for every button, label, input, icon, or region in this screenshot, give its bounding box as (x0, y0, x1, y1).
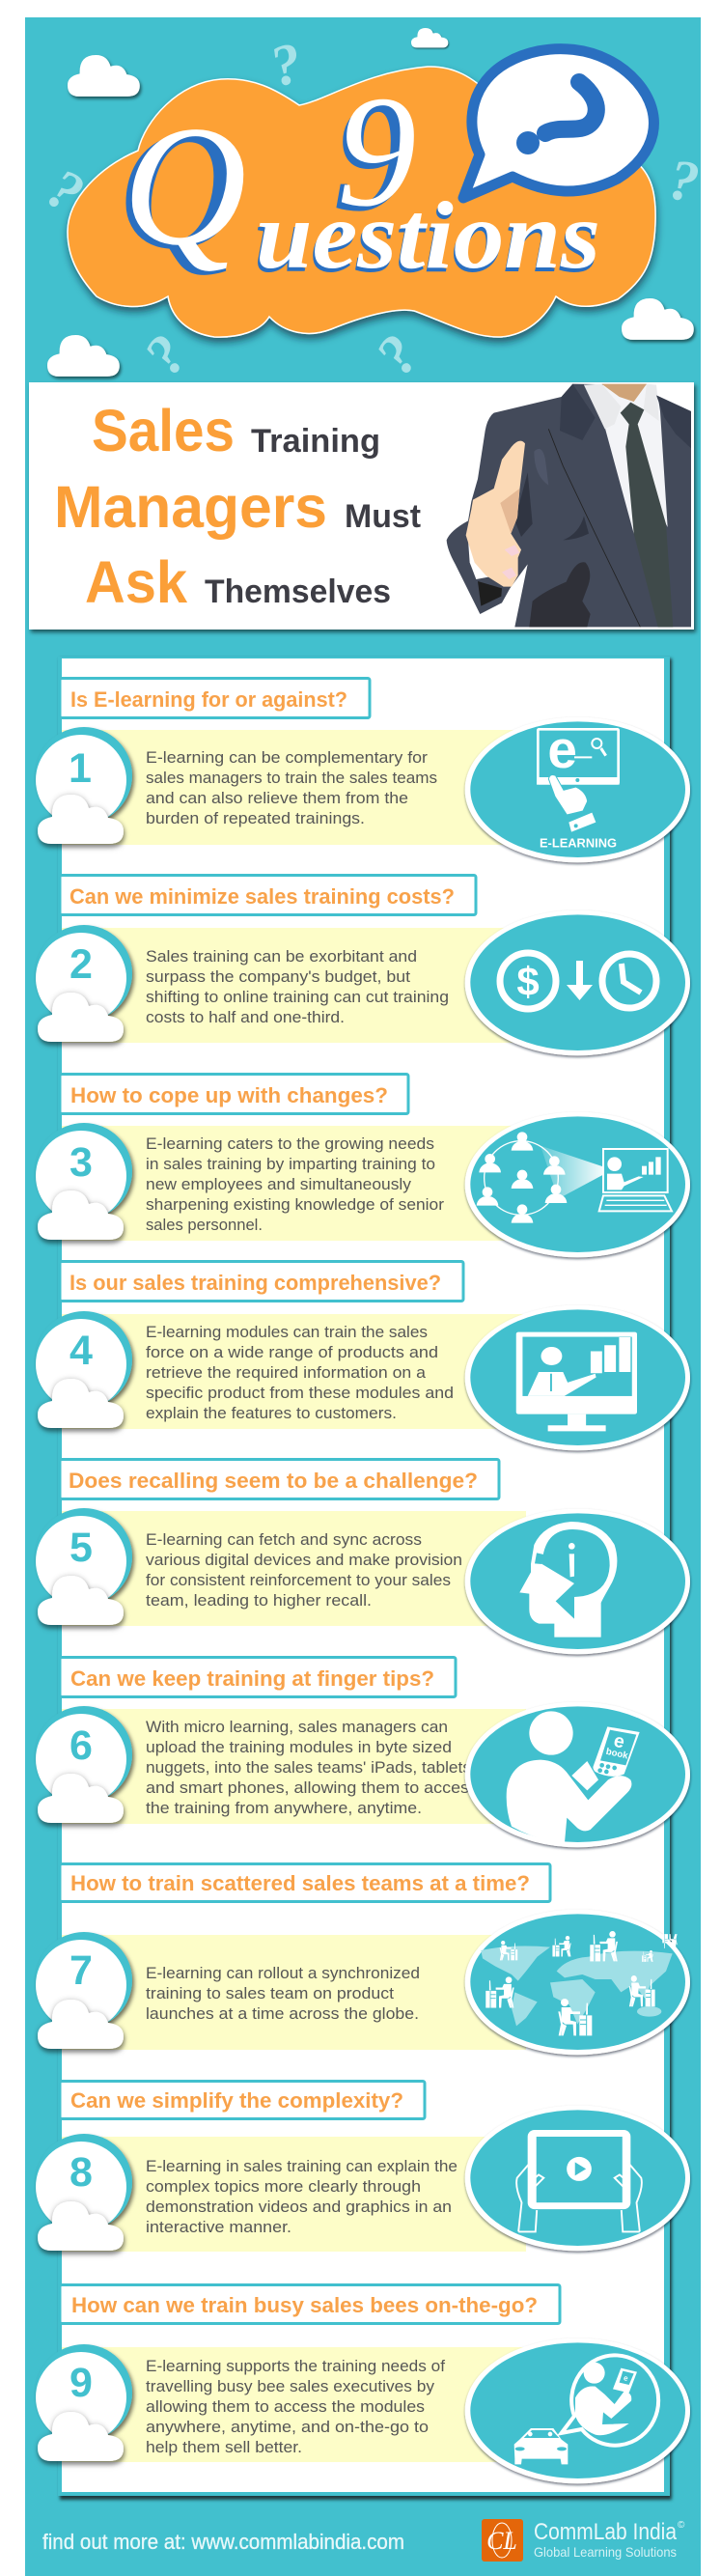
answer text 6: upload the training modules in byte sized (146, 1739, 452, 1756)
answer text 8: demonstration videos and graphics in an (146, 2198, 452, 2216)
answer text 1: E-learning can be complementary for (146, 749, 429, 767)
answer text 4: E-learning modules can train the sales (146, 1324, 428, 1341)
number badge 7: 7 (69, 1947, 93, 1994)
answer text 2: shifting to online training can cut training (146, 989, 449, 1006)
question heading 8: Can we simplify the complexity? (70, 2088, 403, 2113)
title: 9 Questions: uestions (256, 182, 600, 289)
answer text 5: team, leading to higher recall. (146, 1592, 372, 1610)
yellow band 8 (62, 2137, 526, 2252)
number badge 4: 4 (69, 1328, 93, 1374)
icon: person reading ebook (465, 1702, 690, 1847)
icon: e-learning touch screen: e (547, 719, 577, 779)
question heading 2: Can we minimize sales training costs? (69, 884, 455, 909)
speech bubble with question mark (463, 49, 653, 198)
answer text 5: various digital devices and make provision (146, 1552, 462, 1569)
question heading 4: Is our sales training comprehensive? (69, 1271, 441, 1295)
question heading 8 (60, 2082, 425, 2118)
answer text 1: sales managers to train the sales teams (146, 770, 437, 787)
number badge 7 (36, 1932, 132, 2049)
small clouds (47, 28, 694, 377)
subtitle text: Training (251, 423, 380, 460)
subtitle text: Managers (54, 474, 327, 540)
question mark decorations: ? (132, 322, 200, 386)
section 8: heading and answer (36, 2082, 690, 2252)
section 5: heading and answer (36, 1460, 690, 1654)
question mark decorations: ? (38, 156, 94, 226)
question heading 3: How to cope up with changes? (70, 1083, 388, 1107)
answer text 7 (146, 1965, 420, 2023)
answer text 9: help them sell better. (146, 2439, 302, 2456)
subtitle text: Themselves (205, 574, 391, 610)
number badge 1 (36, 727, 132, 844)
answer text 5 (146, 1531, 462, 1610)
number badge 3: 3 (69, 1139, 93, 1186)
white content column (58, 657, 672, 2500)
title: 9 Questions: uestions (254, 185, 599, 293)
answer text 1: burden of repeated trainings. (146, 810, 365, 827)
answer text 3 (146, 1135, 445, 1234)
answer text 8: interactive manner. (146, 2219, 291, 2236)
yellow band 9 (62, 2347, 526, 2462)
section 3: heading and answer (36, 1074, 690, 1257)
question heading 9: How can we train busy sales bees on-the-go? (71, 2293, 538, 2317)
section 4: heading and answer (36, 1261, 690, 1450)
number badge 2 (36, 925, 132, 1042)
answer text 9: anywhere, anytime, and on-the-go to (146, 2419, 429, 2436)
answer text 1 (146, 749, 437, 827)
icon: dollar down arrow clock (465, 910, 690, 1055)
yellow band 6 (62, 1709, 526, 1824)
number badge 8: 8 (69, 2149, 93, 2196)
number badge 8 (36, 2134, 132, 2251)
answer text 7: training to sales team on product (146, 1985, 394, 2002)
question mark decorations (38, 30, 703, 386)
question heading 1: Is E-learning for or against? (70, 687, 347, 712)
answer text 8: E-learning in sales training can explain the (146, 2158, 458, 2175)
answer text 9 (146, 2358, 445, 2456)
answer text 4 (146, 1324, 454, 1422)
answer text 9: travelling busy bee sales executives by (146, 2378, 435, 2395)
question heading 6 (60, 1657, 456, 1697)
yellow band 7 (62, 1935, 526, 2050)
title: 9 Questions: Q (123, 90, 247, 281)
question mark decorations: ? (364, 322, 431, 386)
answer text 9: allowing them to access the modules (146, 2398, 425, 2416)
answer text 3: in sales training by imparting training to (146, 1156, 435, 1173)
answer text 8 (146, 2158, 458, 2236)
subtitle text (54, 398, 421, 615)
answer text 2: costs to half and one-third. (146, 1009, 345, 1026)
footer link text: find out more at: www.commlabindia.com (42, 2530, 404, 2554)
section 2: heading and answer (36, 875, 690, 1055)
answer text 3: sales personnel. (146, 1217, 263, 1234)
subtitle panel (29, 382, 694, 630)
subtitle text: Sales (92, 398, 235, 463)
header banner (38, 28, 703, 386)
question heading 6: Can we keep training at finger tips? (70, 1666, 434, 1691)
answer text 7: launches at a time across the globe. (146, 2005, 419, 2023)
subtitle text: Must (345, 498, 421, 535)
answer text 3: new employees and simultaneously (146, 1176, 412, 1193)
subtitle text: Ask (85, 549, 187, 615)
question heading 4 (60, 1261, 463, 1302)
title: 9 Questions: 9 (337, 63, 417, 239)
number badge 9 (36, 2344, 132, 2461)
answer text 4: retrieve the required information on a (146, 1364, 427, 1382)
answer text 4: specific product from these modules and (146, 1385, 454, 1402)
footer (42, 2519, 685, 2562)
question heading 5 (60, 1460, 499, 1498)
question heading 7: How to train scattered sales teams at a time? (70, 1871, 530, 1895)
icon: head with information recall (465, 1509, 690, 1654)
answer text 8: complex topics more clearly through (146, 2178, 421, 2196)
answer text 1: and can also relieve them from the (146, 790, 408, 807)
number badge 4 (36, 1311, 132, 1428)
yellow band 1 (62, 730, 526, 845)
CommLab India logo: CL (486, 2527, 517, 2555)
question heading 7 (60, 1863, 550, 1902)
answer text 2: surpass the company's budget, but (146, 968, 410, 986)
answer text 6 (146, 1719, 478, 1817)
icon: tablet with video play button (465, 2106, 690, 2251)
section 9: heading and answer (36, 2284, 690, 2483)
businessman offering handshake (447, 384, 691, 627)
number badge 3 (36, 1123, 132, 1240)
title: 9 Questions (120, 63, 600, 293)
icon: world map with workers (465, 1910, 690, 2055)
CommLab India logo: © (678, 2520, 685, 2531)
number badge 5 (36, 1508, 132, 1625)
answer text 2: Sales training can be exorbitant and (146, 948, 417, 966)
CommLab India logo: CommLab India (534, 2519, 678, 2545)
answer text 6: the training from anywhere, anytime. (146, 1800, 422, 1817)
answer text 5: E-learning can fetch and sync across (146, 1531, 422, 1549)
answer text 6: With micro learning, sales managers can (146, 1719, 448, 1736)
number badge 9: 9 (69, 2360, 93, 2406)
answer text 6: and smart phones, allowing them to access (146, 1779, 478, 1797)
question heading 2 (60, 875, 476, 915)
icon: dollar down arrow clock: $ (516, 959, 540, 1004)
answer text 5: for consistent reinforcement to your sales (146, 1572, 451, 1589)
icon: driver thought bubble with ebook: e (623, 2373, 629, 2383)
question heading 5: Does recalling seem to be a challenge? (69, 1469, 478, 1493)
section 1: heading and answer (36, 678, 690, 862)
answer text 9: E-learning supports the training needs of (146, 2358, 445, 2375)
icon: e-learning touch screen (465, 717, 690, 862)
answer text 4: force on a wide range of products and (146, 1344, 438, 1361)
number badge 1: 1 (69, 745, 92, 792)
title: 9 Questions: 9 (334, 68, 413, 244)
CommLab India logo (482, 2519, 685, 2562)
icon: person reading ebook: book (605, 1747, 629, 1762)
icon: driver thought bubble with ebook (465, 2338, 690, 2483)
question mark decorations: ? (264, 30, 309, 98)
yellow band 4 (62, 1314, 526, 1429)
answer text 3: E-learning caters to the growing needs (146, 1135, 434, 1153)
answer text 2 (146, 948, 449, 1026)
icon: team and trainer on laptop (465, 1112, 690, 1257)
icon: presenter on monitor (465, 1305, 690, 1450)
icon: e-learning touch screen: E-LEARNING (540, 836, 617, 850)
question mark decorations: ? (665, 147, 703, 214)
answer text 4: explain the features to customers. (146, 1405, 397, 1422)
number badge 5: 5 (69, 1525, 93, 1571)
question heading 3 (60, 1074, 408, 1114)
CommLab India logo: Global Learning Solutions (534, 2544, 677, 2560)
yellow band 2 (62, 928, 526, 1043)
answer text 3: sharpening existing knowledge of senior (146, 1196, 445, 1214)
answer text 7: E-learning can rollout a synchronized (146, 1965, 420, 1982)
section 7: heading and answer (36, 1863, 690, 2055)
orange cloud (68, 67, 655, 337)
yellow band 3 (62, 1126, 526, 1241)
answer text 6: nuggets, into the sales teams' iPads, tablets (146, 1759, 471, 1777)
title: 9 Questions: Q (120, 94, 244, 285)
question heading 9 (60, 2284, 560, 2323)
number badge 6 (36, 1706, 132, 1823)
number badge 2: 2 (69, 941, 93, 988)
icon: person reading ebook: e (612, 1731, 626, 1753)
section 6: heading and answer (36, 1657, 690, 1847)
yellow band 5 (62, 1511, 526, 1626)
question heading 1 (60, 678, 370, 718)
number badge 6: 6 (69, 1722, 93, 1769)
